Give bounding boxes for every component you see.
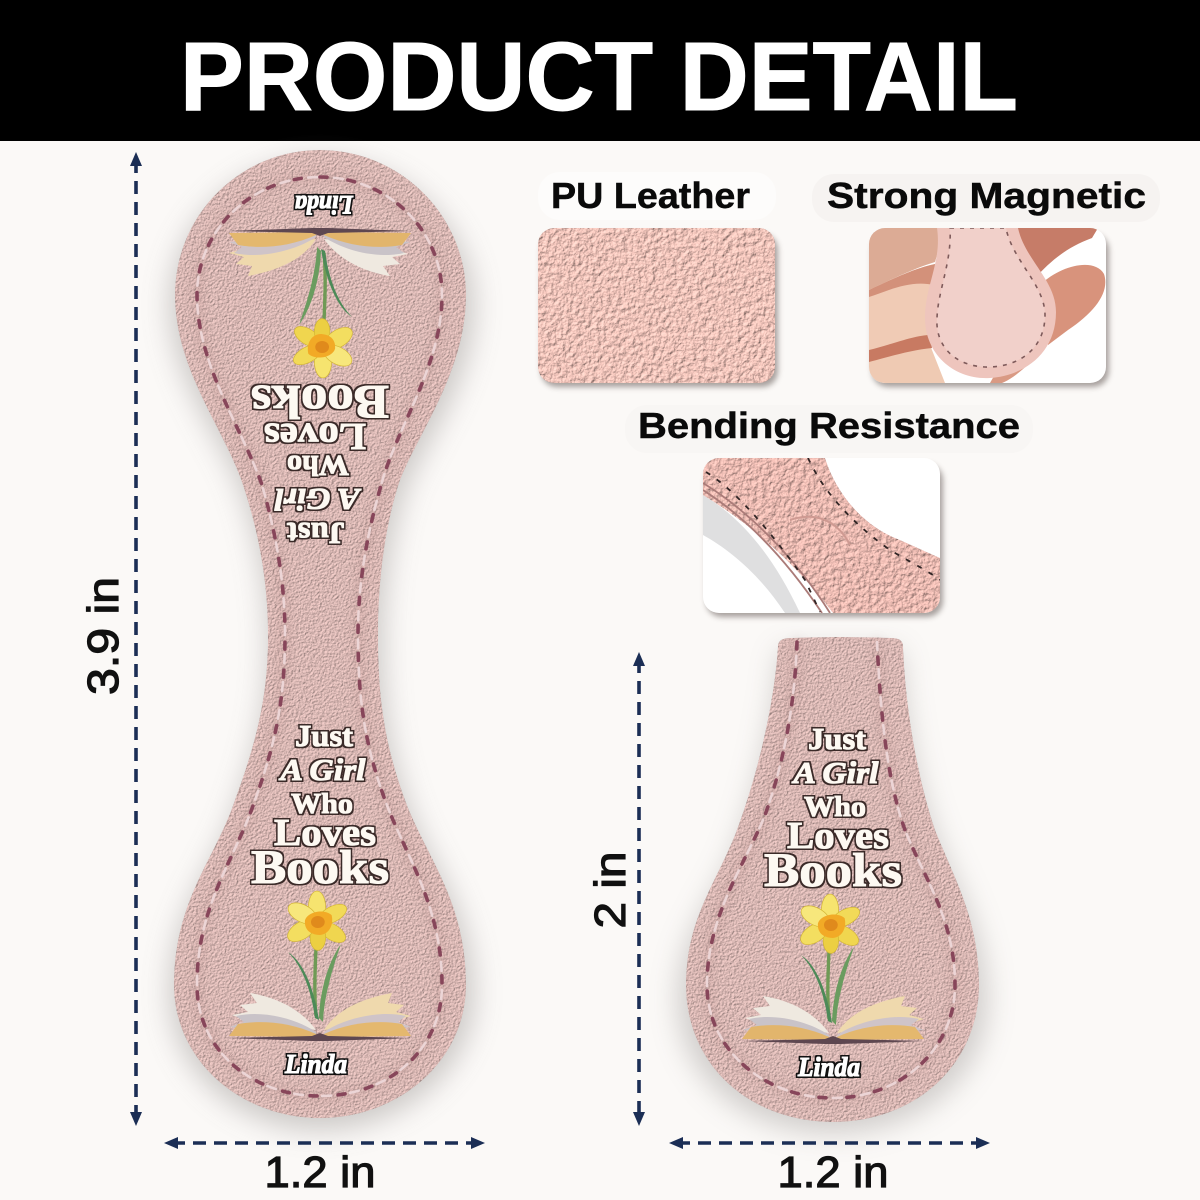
name inverted: Linda (295, 190, 354, 219)
name: Linda (797, 1052, 860, 1082)
heading: PU Leather: PU Leather (551, 175, 750, 216)
bent leather strap (703, 458, 940, 613)
heading: Bending Resistance: Bending Resistance (638, 405, 1020, 446)
leather body (174, 150, 466, 1118)
slogan: Just (295, 718, 354, 753)
long bookmark (170, 150, 474, 1130)
slogan (251, 718, 389, 894)
label: 1.2 in: 1.2 in (264, 1148, 376, 1197)
slogan: Loves (274, 812, 376, 854)
hand and fingers (869, 228, 1105, 383)
name: Linda (284, 1049, 347, 1079)
lower printed design (229, 718, 411, 1079)
title banner (0, 0, 1200, 141)
height arrow: 3.9 in (79, 152, 142, 1126)
printed design (742, 721, 924, 1082)
heading: PU Leather (538, 172, 776, 220)
panel: bending resistance photo (703, 458, 943, 617)
slogan: Who (804, 791, 866, 823)
label: 3.9 in: 3.9 in (79, 577, 128, 695)
short bookmark (678, 637, 987, 1133)
slogan inverted (251, 375, 389, 551)
slogan inverted: A Girl (274, 482, 362, 517)
upper printed design, upside down (229, 190, 411, 551)
width arrow: short bookmark 1.2 in (669, 1137, 990, 1197)
slogan inverted: Who (287, 449, 349, 481)
slogan: Loves (787, 815, 889, 857)
icon: daffodil and open book (742, 894, 924, 1044)
slogan: Who (291, 788, 353, 820)
slogan inverted: Loves (264, 415, 366, 457)
slogan: A Girl (278, 752, 366, 787)
stitching (197, 177, 442, 1096)
heading: Strong Magnetic (812, 174, 1160, 222)
panel: strong magnetic photo (869, 228, 1109, 387)
height arrow: 2 in (586, 652, 645, 1126)
icon: daffodil and open book inverted (229, 228, 411, 378)
slogan: Just (808, 721, 867, 756)
slogan inverted: Books (251, 375, 389, 428)
slogan inverted: Just (286, 516, 345, 551)
slogan: Books (764, 844, 902, 897)
magnetic bookmark tab (925, 228, 1056, 378)
leather body (686, 637, 979, 1122)
stitching (707, 642, 955, 1098)
slogan: A Girl (791, 755, 879, 790)
slogan (764, 721, 902, 897)
title: PRODUCT DETAIL (180, 22, 1018, 131)
heading: Strong Magnetic: Strong Magnetic (827, 175, 1146, 216)
label: 2 in: 2 in (586, 852, 635, 928)
label: 1.2 in: 1.2 in (778, 1148, 888, 1197)
slogan: Books (251, 841, 389, 894)
icon: daffodil and open book (229, 891, 411, 1041)
panel: PU leather swatch (538, 228, 778, 387)
width arrow: long bookmark 1.2 in (164, 1137, 485, 1197)
